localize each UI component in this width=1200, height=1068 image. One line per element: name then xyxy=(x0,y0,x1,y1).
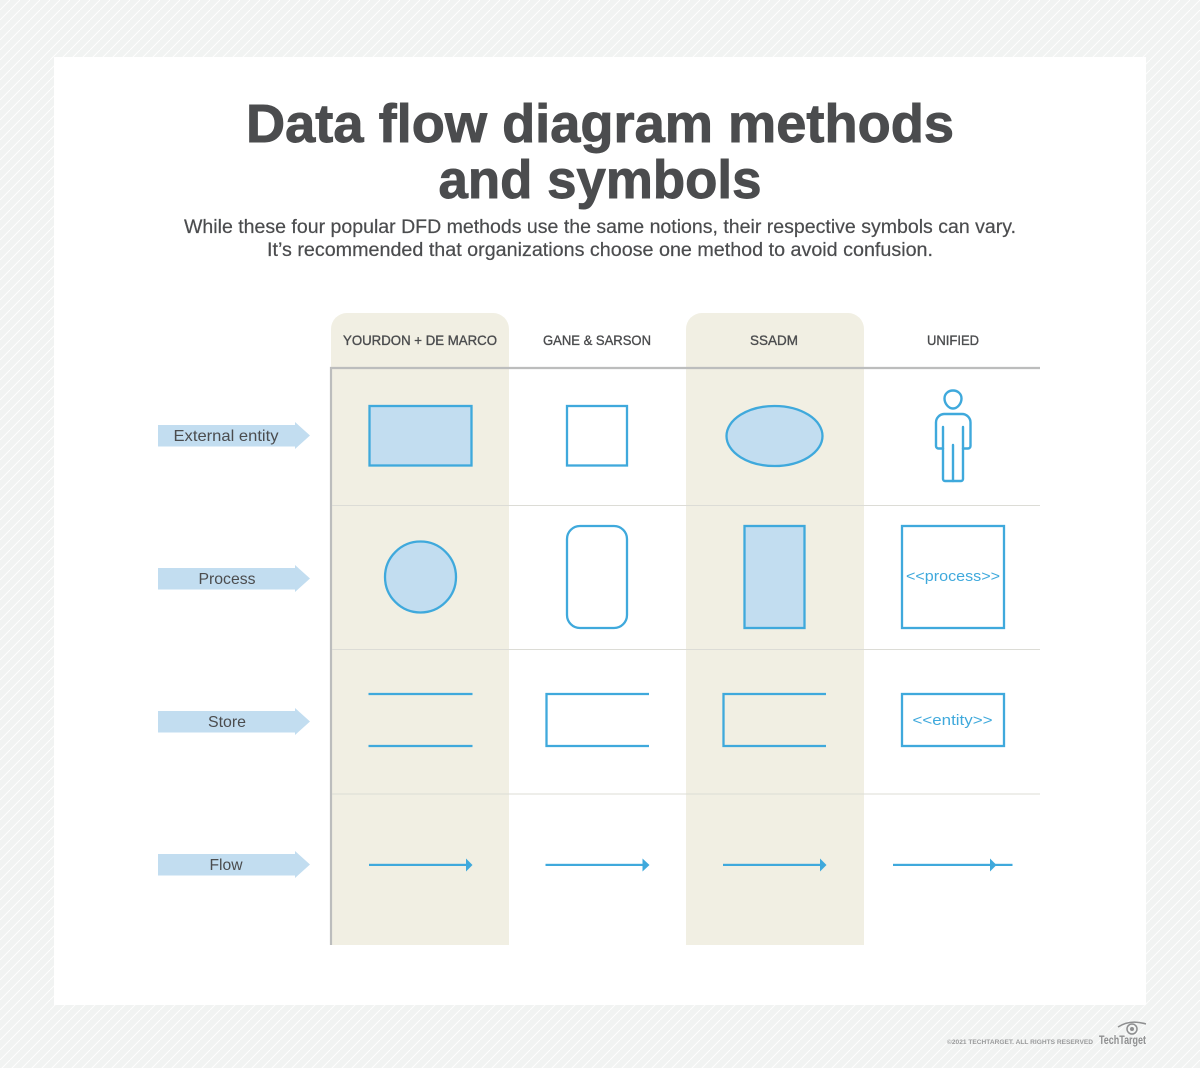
subtitle: It’s recommended that organizations choose one method to avoid confusion. xyxy=(267,240,933,261)
column headings: UNIFIED xyxy=(927,332,979,348)
logo: TechTarget xyxy=(1099,1022,1146,1047)
row label: Process xyxy=(158,565,310,592)
column band: SSADM xyxy=(686,313,864,945)
column headings: SSADM xyxy=(750,332,798,348)
column headings: YOURDON + DE MARCO xyxy=(343,332,497,348)
row label: Store: Store xyxy=(208,714,246,731)
symbol: Unified process: <<process>> xyxy=(906,568,1000,585)
row label: Flow xyxy=(158,851,310,878)
logo: TechTarget: TechTarget xyxy=(1099,1033,1146,1047)
row label: Flow: Flow xyxy=(210,857,243,874)
title xyxy=(246,94,954,210)
copyright: ©2021 TECHTARGET. ALL RIGHTS RESERVED xyxy=(947,1038,1093,1046)
symbol: SSADM store xyxy=(724,694,826,746)
symbol: Unified process xyxy=(902,526,1004,628)
title: and symbols xyxy=(438,150,762,210)
row label: Store xyxy=(158,708,310,735)
column headings: GANE & SARSON xyxy=(543,332,651,348)
row label: External entity xyxy=(158,422,310,449)
arrow: Gane and Sarson flow xyxy=(546,858,650,872)
symbol: Yourdon process xyxy=(385,542,456,612)
subtitle: While these four popular DFD methods use the same notions, their respective symbols can vary. xyxy=(184,217,1016,238)
symbol: Unified external entity xyxy=(936,390,970,481)
title: Data flow diagram methods xyxy=(246,94,954,154)
symbol: Yourdon external entity xyxy=(370,406,472,466)
row label: External entity: External entity xyxy=(174,428,278,445)
arrow: Yourdon flow xyxy=(369,858,472,872)
arrow: SSADM flow xyxy=(723,858,826,872)
table grid lines xyxy=(331,368,1040,945)
symbol: Gane and Sarson store xyxy=(546,694,649,746)
subtitle xyxy=(184,217,1016,261)
symbol: Gane and Sarson external entity xyxy=(567,406,627,466)
column band: Yourdon + De Marco xyxy=(331,313,509,945)
symbol: SSADM external entity xyxy=(726,406,822,466)
symbol: Yourdon store xyxy=(368,694,472,746)
row label: Process: Process xyxy=(198,571,256,588)
symbol: SSADM process xyxy=(744,526,804,628)
column headings xyxy=(343,332,979,348)
symbol: Gane and Sarson process xyxy=(567,526,627,628)
arrow: Unified flow xyxy=(893,858,1012,872)
symbol: Unified store: <<entity>> xyxy=(912,712,993,729)
symbol: Unified store xyxy=(902,694,1004,746)
